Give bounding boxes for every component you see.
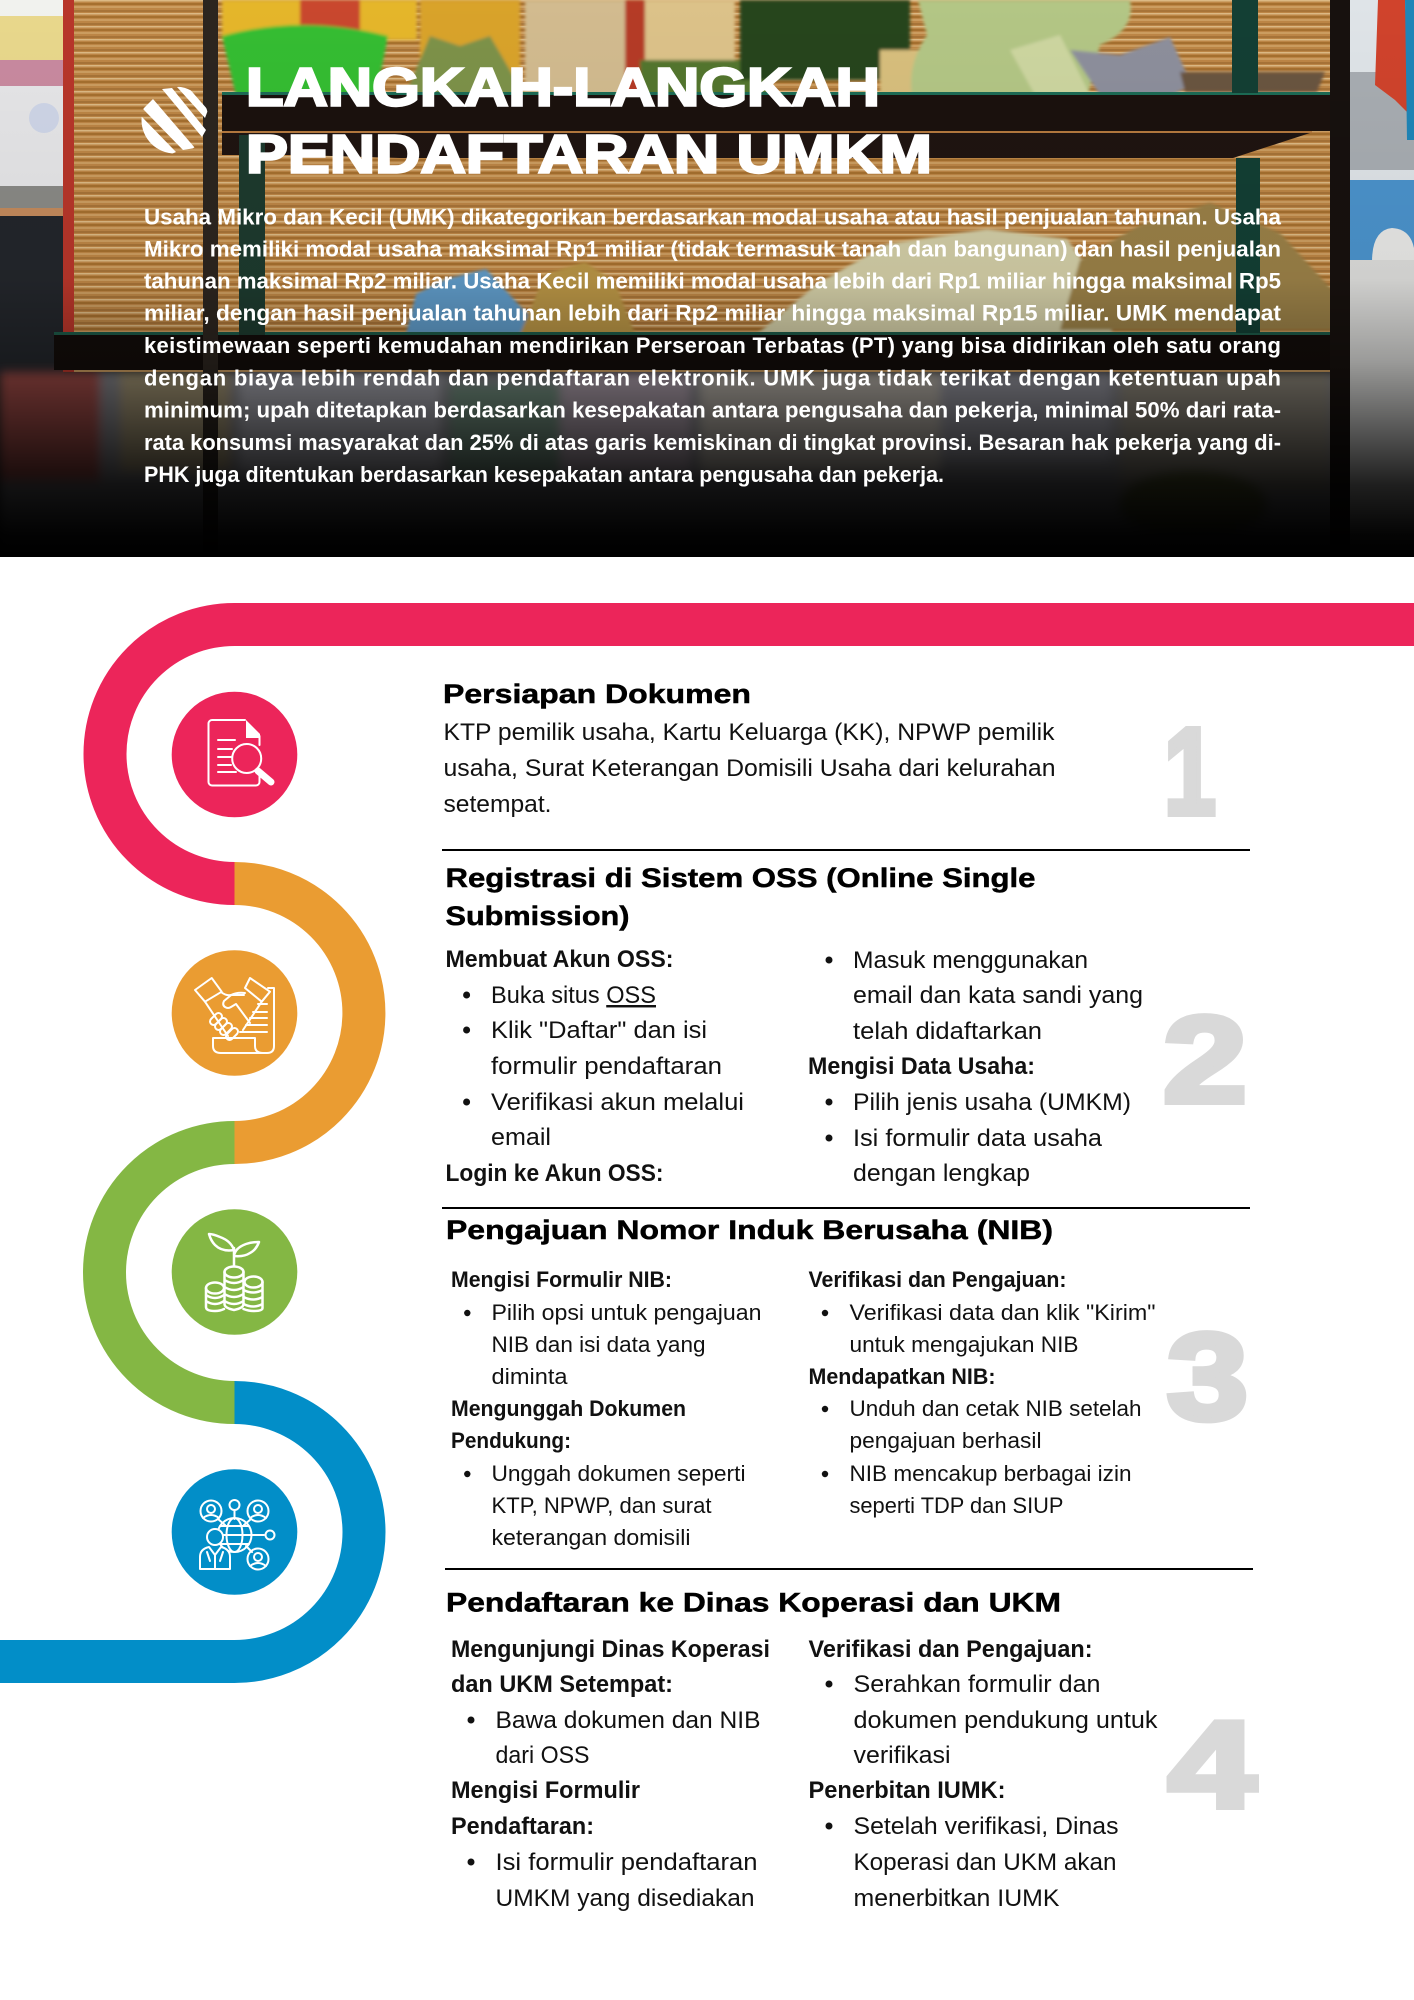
lower shelf piles [406, 269, 532, 334]
step 2 heading [446, 863, 1036, 931]
step 4 left column: Mengisi Formulir [451, 1777, 640, 1804]
intro paragraph [144, 204, 1282, 487]
icon badge: coins and sprout [172, 1209, 297, 1335]
step 2 left column [446, 946, 744, 1187]
step 4 right column: verifikasi [854, 1742, 950, 1769]
intro paragraph: miliar, dengan hasil penjualan tahunan lebih dari Rp2 miliar hingga maksimal Rp15 miliar. UMK mendapat [144, 300, 1282, 326]
orange ribbon segment [234, 884, 364, 1142]
step 3 left column: Mengunggah Dokumen [451, 1396, 686, 1421]
step number 2: 2 [1163, 992, 1247, 1129]
step 4 heading: Pendaftaran ke Dinas Koperasi dan UKM [446, 1588, 1061, 1618]
intro paragraph: rata konsumsi masyarakat dan 25% di atas garis kemiskinan di tingkat provinsi. Besaran hak pekerja yang di- [144, 430, 1281, 455]
pink ribbon segment [105, 624, 1414, 884]
serpentine timeline ribbon [0, 624, 1414, 1662]
intro paragraph: dengan biaya lebih rendah dan pendaftaran elektronik. UMK juga tidak terikat dengan ketentuan upah [144, 366, 1281, 390]
step 3 left column: Pendukung: [451, 1428, 571, 1453]
step 3 right column: Verifikasi dan Pengajuan: [808, 1267, 1066, 1292]
step 3 right column: Unduh dan cetak NIB setelah [850, 1396, 1142, 1421]
step 2 right column: telah didaftarkan [853, 1018, 1042, 1045]
step 4 right column: Koperasi dan UKM akan [854, 1849, 1116, 1876]
logo: striped circle [142, 86, 208, 154]
step 4 right column: Serahkan formulir dan [854, 1671, 1100, 1698]
step 3 left column: keterangan domisili [492, 1525, 690, 1550]
step number 4: 4 [1168, 1697, 1256, 1834]
step 3 left column: diminta [492, 1364, 568, 1389]
step 4 right column: Penerbitan IUMK: [808, 1777, 1006, 1804]
step 2 right column: email dan kata sandi yang [853, 982, 1143, 1009]
step number 1: 1 [1164, 704, 1216, 841]
step 2 right column [808, 947, 1143, 1187]
header photo background [0, 0, 1414, 557]
step 4 left column: dan UKM Setempat: [451, 1671, 673, 1698]
step 3 left column: KTP, NPWP, dan surat [492, 1493, 712, 1518]
step 3 left column: Unggah dokumen seperti [492, 1461, 746, 1486]
step 2 right column: Isi formulir data usaha [853, 1125, 1102, 1152]
step 2 right column: Mengisi Data Usaha: [808, 1053, 1035, 1080]
step 2 heading: Registrasi di Sistem OSS (Online Single [446, 863, 1036, 893]
step 3 heading: Pengajuan Nomor Induk Berusaha (NIB) [446, 1215, 1053, 1245]
step 3 right column: seperti TDP dan SIUP [850, 1493, 1064, 1518]
step 4: Pendaftaran ke Dinas Koperasi [446, 1588, 1256, 1912]
step 1 heading: Persiapan Dokumen [443, 679, 751, 709]
step 1 body text: usaha, Surat Keterangan Domisili Usaha dari kelurahan [444, 755, 1056, 782]
step 3 right column [808, 1267, 1156, 1518]
step 3: Pengajuan NIB [446, 1215, 1248, 1550]
step 3 left column: Mengisi Formulir NIB: [451, 1267, 672, 1292]
green ribbon segment [104, 1142, 234, 1402]
right building [1350, 0, 1414, 180]
intro paragraph: Usaha Mikro dan Kecil (UMK) dikategorikan berdasarkan modal usaha atau hasil penjualan tahunan. Usaha [144, 204, 1282, 230]
step 2 right column: Masuk menggunakan [853, 947, 1088, 974]
step 1: Persiapan Dokumen [443, 679, 1216, 841]
step 2 left column: email [491, 1124, 551, 1151]
step 4 left column: Mengunjungi Dinas Koperasi [451, 1636, 770, 1663]
icon badge: handshake and contract [172, 950, 297, 1076]
step 4 right column: Setelah verifikasi, Dinas [854, 1813, 1118, 1840]
step 4 left column: Pendaftaran: [451, 1813, 594, 1840]
step 4 right column: menerbitkan IUMK [854, 1885, 1060, 1912]
step 2 left column: Buka situs OSS [491, 982, 656, 1009]
icon badge: document search [172, 692, 297, 817]
step 2 left column: formulir pendaftaran [491, 1053, 722, 1080]
intro paragraph: keistimewaan seperti kemudahan mendirikan Perseroan Terbatas (PT) yang bisa didirikan oleh satu orang [144, 333, 1281, 358]
step 1 body text [444, 719, 1056, 818]
intro paragraph: tahunan maksimal Rp2 miliar. Usaha Kecil memiliki modal usaha lebih dari Rp1 miliar hingga maksimal Rp5 [144, 268, 1281, 294]
step 4 right column: dokumen pendukung untuk [854, 1707, 1158, 1734]
title: LANGKAH-LANGKAH [246, 58, 880, 118]
step 2: Registrasi di Sistem OSS [446, 863, 1247, 1187]
darkening gradient [0, 170, 1414, 557]
step 2 left column: Klik "Daftar" dan isi [491, 1017, 707, 1044]
bamboo blind [64, 0, 1332, 372]
intro paragraph: PHK juga ditentukan berdasarkan kesepakatan antara pengusaha dan pekerja. [144, 462, 944, 487]
shelf goods [222, 0, 1345, 334]
step 4 left column: dari OSS [496, 1742, 590, 1769]
step 3 right column: pengajuan berhasil [850, 1428, 1042, 1453]
step 1 body text: setempat. [444, 791, 552, 818]
step 3 left column [451, 1267, 762, 1550]
intro paragraph: minimum; upah ditetapkan berdasarkan kesepakatan antara pengusaha dan pekerja, minimal 50% dari rata- [144, 398, 1281, 422]
step 3 left column: Pilih opsi untuk pengajuan [492, 1300, 762, 1325]
step 4 right column [808, 1636, 1158, 1912]
step 2 right column: dengan lengkap [853, 1160, 1030, 1187]
step number 3: 3 [1167, 1309, 1248, 1446]
blue ribbon segment [0, 1402, 364, 1662]
step 2 left column: Membuat Akun OSS: [446, 946, 674, 973]
step 4 left column: UMKM yang disediakan [496, 1885, 754, 1912]
step 4 left column [451, 1636, 770, 1912]
step 3 right column: Mendapatkan NIB: [808, 1364, 996, 1389]
step 3 right column: untuk mengajukan NIB [850, 1332, 1078, 1357]
step 4 right column: Verifikasi dan Pengajuan: [808, 1636, 1092, 1663]
step 4 left column: Isi formulir pendaftaran [496, 1849, 758, 1876]
step 2 left column: Verifikasi akun melalui [491, 1089, 744, 1116]
left building [0, 0, 64, 16]
step 4 left column: Bawa dokumen dan NIB [496, 1707, 760, 1734]
step 3 right column: NIB mencakup berbagai izin [850, 1461, 1132, 1486]
step 3 right column: Verifikasi data dan klik "Kirim" [850, 1300, 1156, 1325]
icon badge: global network of people [172, 1469, 297, 1595]
step 1 body text: KTP pemilik usaha, Kartu Keluarga (KK), NPWP pemilik [444, 719, 1055, 746]
frame of the stall [222, 95, 1332, 131]
step 3 left column: NIB dan isi data yang [492, 1332, 706, 1357]
step 2 heading: Submission) [446, 901, 630, 931]
title [246, 58, 932, 184]
step 2 right column: Pilih jenis usaha (UMKM) [853, 1089, 1131, 1116]
lower area [0, 366, 1330, 508]
title: PENDAFTARAN UMKM [246, 124, 932, 184]
step 2 left column: Login ke Akun OSS: [446, 1160, 664, 1187]
intro paragraph: Mikro memiliki modal usaha maksimal Rp1 miliar (tidak termasuk tanah dan bangunan) dan hasil penjualan [144, 236, 1281, 262]
